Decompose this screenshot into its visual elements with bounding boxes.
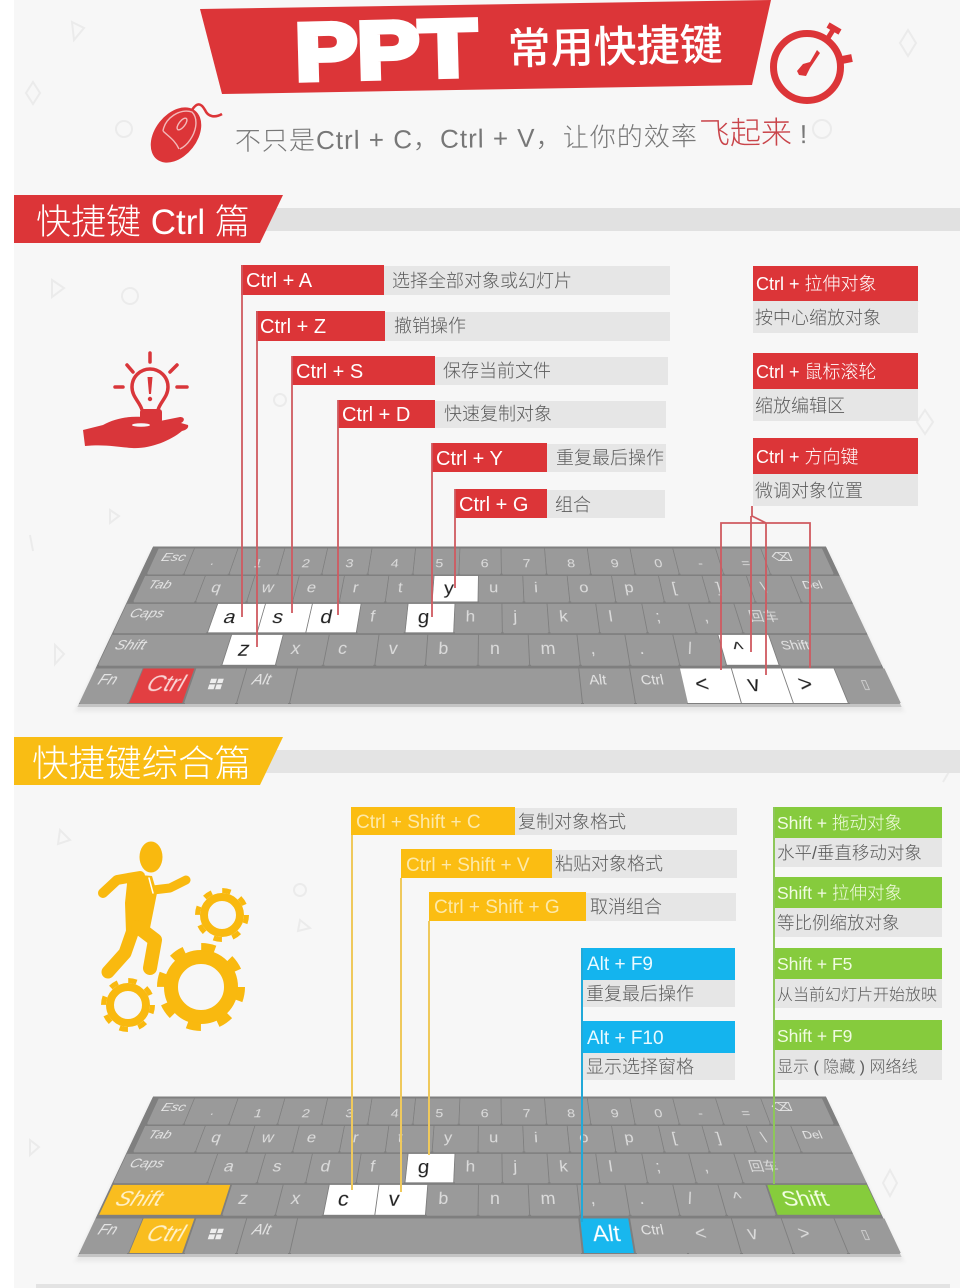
shortcut: Alt + F9: 重复最后操作 <box>586 984 694 1004</box>
keyboard: ctrl shortcuts: 4 <box>390 556 400 570</box>
shortcut: Ctrl + S: Ctrl + S <box>296 361 363 383</box>
keyboard: ctrl shortcuts: x <box>289 639 302 658</box>
keyboard: combo shortcuts: , <box>701 1158 710 1175</box>
shortcut: Ctrl + Shift + C <box>351 807 737 835</box>
connector: blue <box>581 948 583 1222</box>
keyboard: combo shortcuts: e <box>305 1129 318 1145</box>
keyboard: combo shortcuts: f <box>369 1158 376 1175</box>
shortcut: Ctrl + Shift + V: 粘贴对象格式 <box>555 854 663 874</box>
shortcut: Alt + F10: 显示选择窗格 <box>586 1057 694 1077</box>
keyboard: ctrl shortcuts: w <box>260 579 276 595</box>
keyboard: combo shortcuts: 2 <box>300 1106 312 1120</box>
title banner <box>200 0 771 97</box>
keyboard: combo shortcuts: h <box>465 1158 475 1175</box>
keyboard: ctrl shortcuts: Del <box>800 578 825 591</box>
keyboard: combo shortcuts: , <box>589 1189 596 1208</box>
keyboard: ctrl shortcuts: ^ <box>730 637 747 659</box>
shortcut: Ctrl + D <box>338 400 666 428</box>
keyboard: combo shortcuts: Ctrl <box>639 1222 665 1238</box>
connectors: ctrl section <box>242 265 810 675</box>
keyboard: combo shortcuts: o <box>578 1129 589 1145</box>
keyboard: ctrl shortcuts: 7 <box>522 556 531 570</box>
keyboard: combo shortcuts: 0 <box>653 1106 664 1120</box>
keyboard: ctrl shortcuts: Shift <box>778 637 812 652</box>
keyboard: combo shortcuts: v <box>745 1224 761 1244</box>
keyboard: ctrl shortcuts: g <box>417 605 430 626</box>
keyboard: combo shortcuts: l <box>607 1158 614 1175</box>
keyboard: combo shortcuts: ⌫ <box>769 1100 795 1113</box>
keyboard: combo shortcuts: n <box>490 1189 500 1208</box>
keyboard: ctrl shortcuts: · <box>207 556 217 570</box>
shortcut: Ctrl + A <box>241 265 670 295</box>
shortcut: Ctrl + S <box>292 356 668 385</box>
keyboard: combo shortcuts: u <box>489 1129 498 1145</box>
keyboard: combo shortcuts: ▯ <box>858 1226 872 1241</box>
shortcut: Ctrl + A: Ctrl + A <box>246 270 313 292</box>
keyboard: ctrl shortcuts: Ctrl <box>143 671 189 697</box>
keyboard: combo shortcuts: 4 <box>390 1106 400 1120</box>
keyboard: ctrl shortcuts: 1 <box>252 556 264 570</box>
keyboard: ctrl shortcuts: Alt <box>250 672 273 688</box>
icon: running man on gears <box>103 842 246 1030</box>
keyboard: combo shortcuts: t <box>397 1129 404 1145</box>
keyboard: ctrl shortcuts: \ <box>758 579 769 595</box>
shortcut: Alt + F9 <box>582 948 735 1007</box>
keyboard: combo shortcuts: Shift <box>778 1187 832 1210</box>
keyboard: ctrl shortcuts: n <box>490 639 500 658</box>
keyboard: ctrl shortcuts: l <box>607 608 614 625</box>
keyboard: ctrl shortcuts: a <box>221 605 239 626</box>
shortcut: Shift + drag: 水平/垂直移动对象 <box>777 843 922 863</box>
shortcut: Shift + F9 <box>774 1020 942 1080</box>
keyboard: combo shortcuts: p <box>623 1129 635 1145</box>
keyboard: combo shortcuts: x <box>289 1189 302 1208</box>
keyboard: ctrl shortcuts: r <box>352 579 360 595</box>
keyboard: ctrl shortcuts: e <box>305 579 318 595</box>
shortcut: Shift + stretch: 等比例缩放对象 <box>777 913 900 933</box>
keyboard: ctrl shortcuts: = <box>739 556 752 570</box>
keyboard: combo shortcuts: / <box>685 1189 695 1208</box>
keyboard: ctrl shortcuts: , <box>589 639 596 658</box>
keyboard: combo shortcuts: Caps <box>127 1156 167 1170</box>
keyboard: combo shortcuts: z <box>236 1189 250 1208</box>
keyboard: ctrl shortcuts: > <box>794 671 817 696</box>
shortcut: Shift + F5: 从当前幻灯片开始放映 <box>777 986 937 1004</box>
keyboard: ctrl shortcuts: , <box>701 608 710 625</box>
keyboard: ctrl shortcuts: f <box>369 608 376 625</box>
keyboard: combo shortcuts: Alt <box>250 1222 273 1238</box>
subtitle <box>235 115 807 156</box>
shortcut: Ctrl + arrows: 微调对象位置 <box>755 481 863 501</box>
keyboard: combo shortcuts: \ <box>758 1129 769 1145</box>
shortcut: Ctrl + Y <box>432 443 666 472</box>
keyboard: combo shortcuts: Tab <box>146 1128 174 1141</box>
section band: ctrl <box>265 208 960 231</box>
keyboard: ctrl shortcuts: ▯ <box>858 676 872 691</box>
shortcut: Ctrl + Z: Ctrl + Z <box>260 316 326 338</box>
shortcut: Shift + F9: Shift + F9 <box>777 1026 852 1046</box>
keyboard: combo shortcuts: v <box>387 1187 401 1209</box>
keyboard: ctrl shortcuts: 9 <box>610 556 620 570</box>
shortcut: Ctrl + Shift + G: Ctrl + Shift + G <box>434 897 560 918</box>
icon: stopwatch <box>774 25 852 100</box>
keyboard: combo shortcuts: 回车 <box>747 1159 781 1173</box>
keyboard: ctrl shortcuts: Alt <box>588 672 607 688</box>
shortcut: Ctrl + S: 保存当前文件 <box>443 361 551 381</box>
keyboard: combo shortcuts: i <box>534 1129 538 1145</box>
keyboard: combo shortcuts: Fn <box>95 1222 120 1238</box>
section heading: ctrl: 快捷键 Ctrl 篇 <box>36 203 250 242</box>
keyboard: ctrl shortcuts <box>79 546 900 703</box>
keyboard: combo shortcuts: < <box>693 1224 709 1244</box>
keyboard: combo shortcuts: ; <box>654 1158 662 1175</box>
keyboard: ctrl shortcuts: 2 <box>300 556 312 570</box>
keyboard: combo shortcuts: 7 <box>522 1106 531 1120</box>
shortcut: Shift + F5 <box>774 948 942 1008</box>
keyboard: combo shortcuts: b <box>438 1189 449 1208</box>
section heading: combos <box>14 737 283 785</box>
shortcut: Shift + drag: Shift + 拖动对象 <box>777 813 902 833</box>
keyboard: ctrl shortcuts: k <box>559 608 569 625</box>
shortcut: Ctrl + G <box>455 489 665 518</box>
keyboard: combo shortcuts: r <box>352 1129 360 1145</box>
shortcut: Ctrl + wheel <box>753 353 918 421</box>
keyboard: ctrl shortcuts: i <box>534 579 538 595</box>
section heading: ctrl <box>14 195 283 243</box>
title PPT: PPT <box>294 3 478 97</box>
keyboard: combo shortcuts: 6 <box>481 1106 489 1120</box>
keyboard: combo shortcuts: 3 <box>344 1106 355 1120</box>
keyboard: combo shortcuts: 1 <box>252 1106 264 1120</box>
shortcut: Ctrl + Z <box>256 311 670 341</box>
keyboard: combo shortcuts: a <box>221 1158 237 1175</box>
shortcut: Ctrl + G: 组合 <box>555 495 591 515</box>
keyboard: ctrl shortcuts: ; <box>654 608 662 625</box>
keyboard: combo shortcuts: Alt <box>591 1221 622 1247</box>
keyboard: ctrl shortcuts: o <box>578 579 589 595</box>
shortcut: Ctrl + Shift + V: Ctrl + Shift + V <box>406 855 530 876</box>
icon: mouse <box>140 98 222 172</box>
shortcut: Ctrl + drag: 按中心缩放对象 <box>755 308 881 328</box>
keyboard: combo shortcuts: g <box>417 1155 430 1176</box>
shortcut: Ctrl + wheel: 缩放编辑区 <box>755 396 845 416</box>
shortcut: Ctrl + Shift + V <box>401 849 737 878</box>
keyboard: ctrl shortcuts: c <box>336 639 349 658</box>
keyboard: combo shortcuts: Shift <box>112 1187 167 1210</box>
keyboard: ctrl shortcuts: p <box>623 579 635 595</box>
bottom band <box>36 1284 950 1288</box>
shortcut: Ctrl + Y: Ctrl + Y <box>436 448 503 470</box>
shortcut: Shift + F9: 显示 ( 隐藏 ) 网络线 <box>777 1058 917 1076</box>
shortcut: Alt + F10 <box>582 1021 735 1080</box>
keyboard: ctrl shortcuts: s <box>270 605 286 626</box>
shortcut: Shift + drag <box>774 807 942 867</box>
keyboard: combo shortcuts: Esc <box>159 1100 188 1113</box>
connectors: yellow <box>352 835 429 1192</box>
keyboard: ctrl shortcuts: j <box>513 608 517 625</box>
shortcut: Ctrl + Y: 重复最后操作 <box>556 448 664 468</box>
keyboard: combo shortcuts: 9 <box>610 1106 620 1120</box>
keyboard: combo shortcuts: 5 <box>435 1106 444 1120</box>
keyboard: ctrl shortcuts: Shift <box>112 637 149 652</box>
keyboard: ctrl shortcuts: . <box>637 639 646 658</box>
keyboard: ctrl shortcuts: 3 <box>344 556 355 570</box>
keyboard: ctrl shortcuts: Caps <box>127 606 167 620</box>
keyboard: combo shortcuts: · <box>207 1106 217 1120</box>
keyboard: combo shortcuts: c <box>336 1187 351 1209</box>
keyboard: ctrl shortcuts: 6 <box>481 556 489 570</box>
shortcut: Ctrl + Shift + C: 复制对象格式 <box>518 812 626 832</box>
shortcut: Ctrl + Shift + C: Ctrl + Shift + C <box>356 812 481 833</box>
keyboard: ctrl shortcuts: Ctrl <box>639 672 665 688</box>
keyboard: ctrl shortcuts: [ <box>670 579 679 595</box>
keyboard: combo shortcuts: y <box>444 1129 453 1145</box>
keyboard: combo shortcuts: q <box>209 1129 224 1145</box>
shortcut: Ctrl + Z: 撤销操作 <box>394 316 466 336</box>
shortcut: Ctrl + D: 快速复制对象 <box>444 404 552 424</box>
keyboard: combo shortcuts: > <box>795 1224 814 1244</box>
shortcut: Ctrl + G: Ctrl + G <box>459 494 528 516</box>
keyboard: combo shortcuts: m <box>540 1189 556 1208</box>
shortcut: Ctrl + arrows <box>753 438 918 506</box>
keyboard: ctrl shortcuts: / <box>685 639 695 658</box>
keyboard: ctrl shortcuts: y <box>443 577 454 597</box>
keyboard: ctrl shortcuts: v <box>744 671 763 696</box>
keyboard: combo shortcuts: Ctrl <box>143 1221 189 1247</box>
shortcut: Ctrl + A: 选择全部对象或幻灯片 <box>392 271 572 291</box>
keyboard: ctrl shortcuts: Tab <box>146 578 174 591</box>
banner shape <box>200 0 771 94</box>
icon: hand holding light bulb <box>83 353 188 448</box>
keyboard: combo shortcuts: s <box>271 1158 284 1175</box>
section heading: combos: 快捷键综合篇 <box>32 743 251 784</box>
shortcut: Shift + F5: Shift + F5 <box>777 954 852 974</box>
keyboard: ctrl shortcuts: Fn <box>95 672 120 688</box>
keyboard: combo shortcuts: 8 <box>566 1106 576 1120</box>
keyboard: ctrl shortcuts: m <box>540 639 556 658</box>
keyboard: ctrl shortcuts: < <box>692 671 712 696</box>
connector: green <box>773 807 775 1184</box>
title chinese: 常用快捷键 <box>507 22 723 74</box>
keyboard: combo shortcuts: Del <box>800 1128 825 1141</box>
keyboard: ctrl shortcuts: t <box>397 579 404 595</box>
keyboard: ctrl shortcuts: v <box>388 639 399 658</box>
keyboard: combo shortcuts: = <box>739 1106 752 1120</box>
keyboard: ctrl shortcuts: b <box>438 639 449 658</box>
keyboard: combo shortcuts: w <box>260 1129 276 1145</box>
keyboard: combo shortcuts: j <box>513 1158 517 1175</box>
shortcut: Ctrl + drag <box>753 266 918 333</box>
keyboard: ctrl shortcuts: 8 <box>566 556 576 570</box>
keyboard: combo shortcuts: k <box>559 1158 569 1175</box>
subtitle red emphasis: 飞起来 ! <box>699 115 807 151</box>
keyboard: ctrl shortcuts: h <box>465 608 475 625</box>
keyboard: ctrl shortcuts: q <box>209 579 224 595</box>
keyboard: combo shortcuts: . <box>637 1189 646 1208</box>
keyboard: ctrl shortcuts: 5 <box>435 556 444 570</box>
shortcut: Alt + F9: Alt + F9 <box>587 954 653 975</box>
shortcut: Ctrl + arrows: Ctrl + 方向键 <box>756 447 859 467</box>
keyboard: combo shortcuts: ] <box>714 1129 723 1145</box>
shortcut: Ctrl + drag: Ctrl + 拉伸对象 <box>756 274 877 294</box>
keyboard: ctrl shortcuts: z <box>235 637 253 659</box>
shortcut: Ctrl + Shift + G <box>429 892 736 921</box>
keyboard: ctrl shortcuts: ] <box>714 579 723 595</box>
keyboard: ctrl shortcuts: 0 <box>653 556 664 570</box>
subtitle grey text: 不只是Ctrl + C，Ctrl + V，让你的效率 <box>235 121 697 156</box>
keyboard: ctrl shortcuts: u <box>489 579 498 595</box>
keyboard: combo shortcuts: d <box>319 1158 332 1175</box>
section band: combos <box>265 750 960 773</box>
keyboard: combo shortcuts: - <box>696 1106 705 1120</box>
keyboard: combo shortcuts <box>79 1096 900 1253</box>
keyboard: ctrl shortcuts: 回车 <box>747 609 781 623</box>
keyboard: ctrl shortcuts: - <box>696 556 705 570</box>
shortcut: Alt + F10: Alt + F10 <box>587 1028 664 1049</box>
shortcut: Ctrl + Shift + G: 取消组合 <box>590 897 662 917</box>
keyboard: ctrl shortcuts: ⌫ <box>769 550 795 563</box>
keyboard: combo shortcuts: ^ <box>731 1189 745 1208</box>
keyboard: combo shortcuts: [ <box>670 1129 679 1145</box>
keyboard: ctrl shortcuts: d <box>319 605 334 626</box>
shortcut: Shift + stretch <box>774 877 942 937</box>
shortcut: Ctrl + D: Ctrl + D <box>342 404 410 426</box>
keyboard: ctrl shortcuts: Esc <box>159 550 188 563</box>
shortcut: Ctrl + wheel: Ctrl + 鼠标滚轮 <box>756 362 877 382</box>
shortcut: Shift + stretch: Shift + 拉伸对象 <box>777 883 902 903</box>
